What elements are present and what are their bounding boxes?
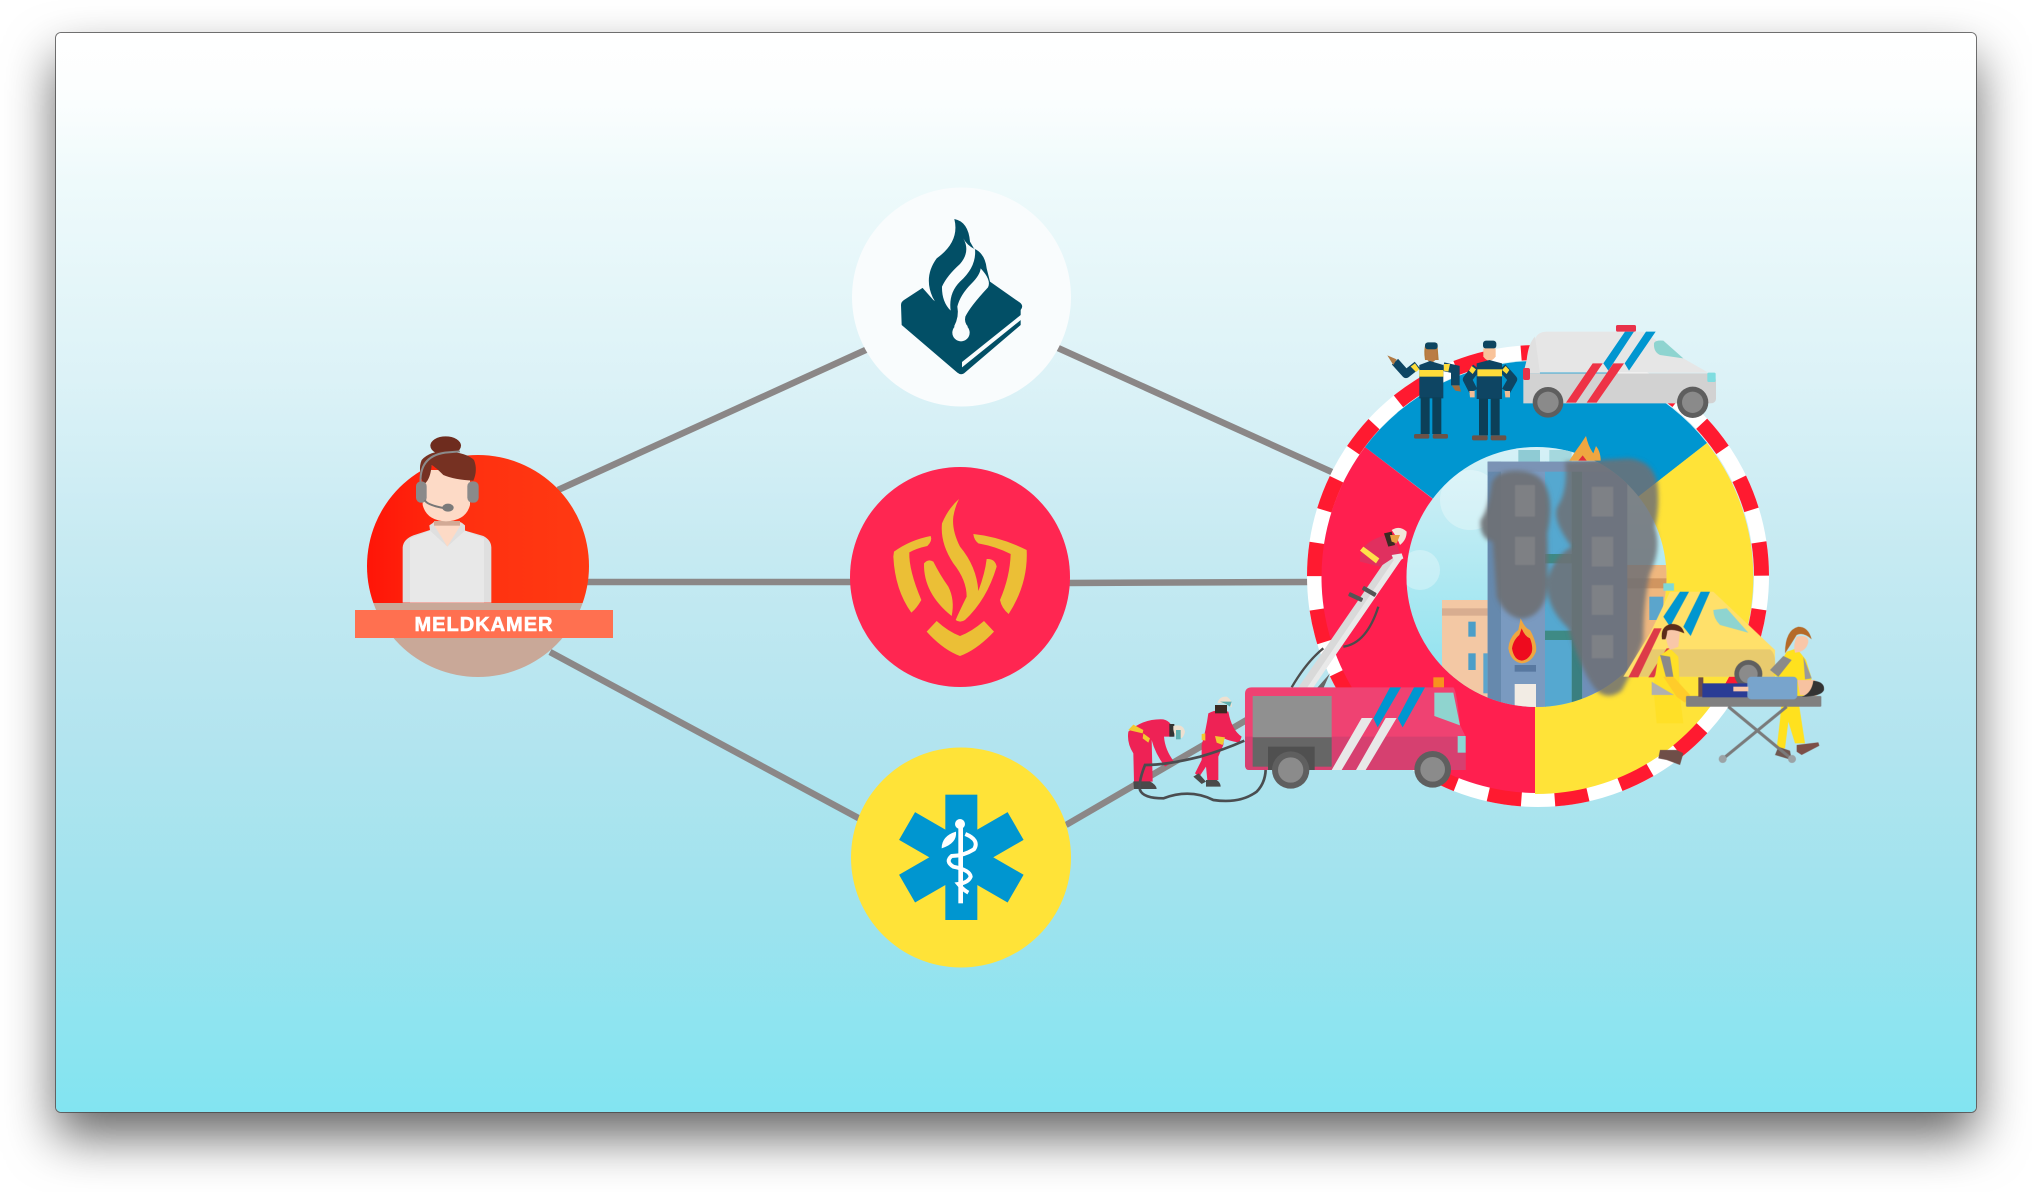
police officers [1387, 341, 1513, 440]
diagram [355, 188, 1824, 968]
van rear light [1523, 368, 1530, 380]
firefighter bending [1128, 719, 1185, 789]
ambulance wheel [1734, 660, 1762, 688]
connector: fire brigade to incident [1066, 582, 1310, 583]
icon: roof flame [1569, 436, 1601, 461]
icon: star of life [899, 795, 1024, 920]
icon: flame in window [1508, 618, 1536, 663]
red sector [1321, 447, 1535, 793]
truck stripes [1373, 687, 1425, 727]
firefighter on ladder [1348, 528, 1407, 602]
ambulance badge [851, 748, 1071, 968]
ambulance window [1713, 608, 1748, 633]
officer 1 [1387, 342, 1461, 439]
yellow sector [1535, 443, 1753, 794]
icon: fire brigade shield [893, 499, 1027, 656]
truck body [1245, 677, 1466, 770]
police van [1523, 325, 1716, 418]
ambulance body [1623, 592, 1775, 677]
operator circle background [367, 455, 589, 677]
connector: police to incident [1058, 348, 1334, 473]
stretcher [1686, 696, 1821, 763]
connector: meldkamer to fire brigade [585, 579, 855, 585]
scene buildings [1442, 450, 1670, 713]
fire brigade badge [850, 467, 1070, 687]
ladder hose [1292, 607, 1378, 687]
wheels [1677, 387, 1708, 418]
meldkamer label: MELDKAMER [414, 614, 554, 636]
officer 2 [1467, 341, 1513, 440]
icon: police flame and book [901, 219, 1022, 374]
patient [1698, 677, 1824, 699]
ambulance stripes [1663, 592, 1710, 636]
dashed ring [1314, 352, 1762, 800]
connector: meldkamer to ambulance [550, 652, 862, 820]
connector: ambulance to incident [1066, 718, 1250, 825]
roof light [1616, 325, 1636, 332]
van stripes [1603, 332, 1656, 371]
meldkamer operator badge [355, 436, 613, 677]
windows through smoke [1515, 485, 1613, 658]
blue sector [1365, 361, 1707, 577]
truck ladder [1298, 557, 1403, 688]
van body [1527, 332, 1708, 373]
firefighter pulling hose [1193, 697, 1242, 787]
paramedic left [1652, 624, 1690, 765]
operator figure [403, 436, 491, 603]
yellow ambulance [1623, 583, 1824, 765]
inner scene with burning building [1406, 447, 1666, 707]
police badge [852, 188, 1071, 406]
meldkamer label [355, 610, 613, 638]
van windows [1654, 341, 1683, 358]
connector: meldkamer to police [558, 348, 870, 490]
fire truck with ladder and crew [1128, 557, 1466, 801]
fire hose [1140, 741, 1266, 801]
incident ring [1314, 352, 1762, 800]
truck wheels [1272, 751, 1309, 789]
smoke columns [1481, 458, 1658, 696]
paramedic right [1770, 627, 1819, 760]
